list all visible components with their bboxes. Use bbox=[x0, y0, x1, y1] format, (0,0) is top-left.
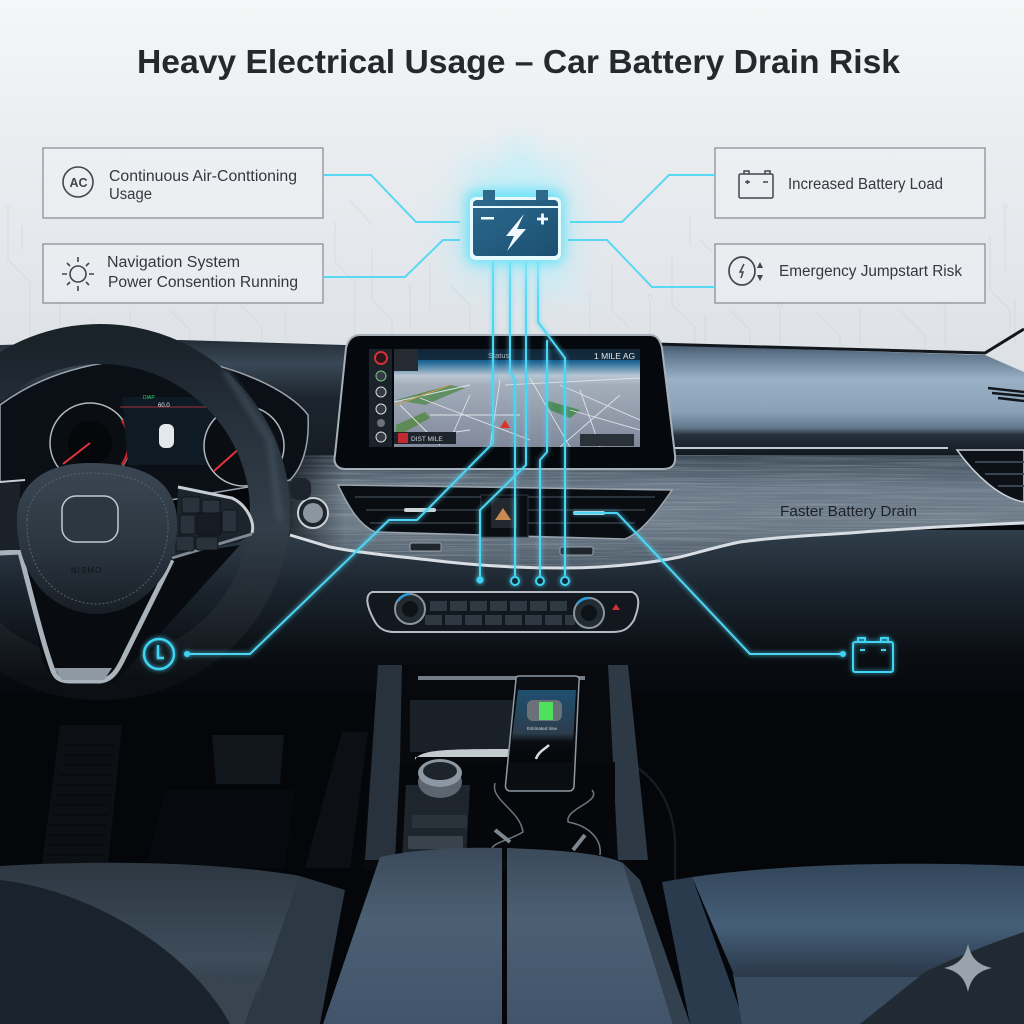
icon: battery outline bbox=[739, 171, 773, 198]
brake pedal bbox=[212, 735, 284, 784]
battery graphic bbox=[527, 700, 562, 721]
right air vent bbox=[957, 450, 1024, 502]
foot rest bbox=[42, 725, 122, 865]
icon: AC: AC bbox=[70, 176, 88, 190]
centre display: 60.0 bbox=[158, 403, 170, 409]
panel: centre console bbox=[362, 665, 648, 870]
watermark sparkle bbox=[944, 944, 992, 992]
circuit board pattern background bbox=[6, 200, 1015, 350]
panel: climate controls bbox=[367, 592, 638, 632]
dashboard corner vent bbox=[988, 388, 1024, 401]
phone charge symbol bbox=[536, 745, 549, 759]
driver seat foreground shadow bbox=[0, 880, 230, 1024]
battery charge level bbox=[539, 702, 553, 720]
wheel emblem bbox=[62, 496, 118, 542]
title: Heavy Electrical Usage – Car Battery Drain Risk bbox=[137, 44, 900, 81]
connector nodes bbox=[185, 577, 845, 656]
centre display bbox=[120, 395, 218, 465]
map bottom left widget bbox=[394, 432, 456, 444]
navigation map: 1 MILE AG bbox=[594, 351, 635, 361]
icon: clock bbox=[144, 639, 174, 669]
label: power consumption: Power Consention Running bbox=[108, 274, 298, 291]
label: navigation system: Navigation System bbox=[107, 254, 240, 271]
panel: navigation system bbox=[43, 244, 323, 303]
wheel rim joint highlight bbox=[225, 370, 280, 520]
sidebar icons bbox=[369, 349, 392, 447]
rotary controller bbox=[402, 759, 470, 860]
panel: instrument cluster bbox=[0, 358, 308, 500]
navigation map bbox=[394, 349, 640, 447]
cup holder bbox=[492, 783, 600, 855]
panel: navigation screen bbox=[334, 335, 675, 469]
panel: passenger seat bbox=[662, 864, 1024, 1024]
wheel buttons bbox=[176, 497, 237, 551]
phone with battery screen bbox=[505, 676, 579, 791]
phone status text: Estimated time bbox=[527, 726, 557, 731]
right gauge bbox=[204, 406, 284, 486]
label: battery load: Increased Battery Load bbox=[788, 176, 943, 193]
navigation map: Status bbox=[488, 351, 510, 360]
icon: jumpstart bbox=[729, 257, 763, 285]
right climate knob bbox=[574, 598, 604, 628]
panel: steering wheel hub: NISMO bbox=[71, 566, 102, 575]
floor mat bbox=[145, 790, 295, 868]
panel: driver seat bbox=[0, 863, 345, 1024]
silver dash trim bbox=[290, 523, 1024, 568]
panel: steering wheel hub bbox=[17, 463, 177, 614]
centre display: DIAP bbox=[143, 395, 155, 401]
car icon bbox=[159, 424, 174, 448]
connector lines: side panels to battery bbox=[324, 175, 715, 287]
panel: central air vents bbox=[338, 485, 672, 539]
a-pillar bbox=[655, 329, 1024, 353]
small dash emblems bbox=[410, 543, 593, 555]
panel: continuous air conditioning bbox=[43, 148, 323, 218]
engine start button bbox=[298, 498, 328, 528]
steering wheel rim bbox=[0, 344, 270, 680]
label: faster battery drain: Faster Battery Drain bbox=[780, 503, 917, 520]
navigation map: DIST MILE bbox=[411, 436, 443, 443]
panel: emergency jumpstart risk bbox=[715, 244, 985, 303]
hazard button bbox=[481, 495, 528, 537]
panel: armrest bbox=[323, 848, 690, 1024]
left climate knob bbox=[395, 594, 425, 624]
dash trim strip bbox=[675, 447, 948, 449]
accelerator pedal bbox=[305, 732, 368, 868]
panel: upper dashboard bbox=[340, 345, 1024, 460]
phone cable bbox=[590, 753, 675, 880]
foot well bbox=[0, 695, 1024, 1024]
stalk bbox=[290, 478, 311, 500]
icon: glowing battery bbox=[853, 638, 893, 672]
label: jumpstart risk: Emergency Jumpstart Risk bbox=[779, 263, 962, 280]
connector lines: car features to battery bbox=[187, 262, 843, 654]
map bottom right widget bbox=[580, 434, 634, 446]
panel: increased battery load bbox=[715, 148, 985, 218]
panel: steering wheel spokes bbox=[0, 480, 253, 682]
icon: AC bbox=[63, 167, 93, 197]
panel: lower dashboard bbox=[0, 530, 1024, 710]
icon: central battery bbox=[470, 190, 561, 260]
label: air conditioning: Continuous Air-Conttioning bbox=[109, 168, 297, 185]
climate warning light bbox=[612, 604, 620, 610]
label: usage: Usage bbox=[109, 186, 152, 203]
icon: sun bbox=[62, 257, 94, 291]
panel: left dashboard area bbox=[0, 340, 345, 470]
battery glow bbox=[415, 125, 615, 325]
map top bar bbox=[394, 349, 640, 360]
left gauge bbox=[50, 403, 130, 483]
panel: wood dash trim bbox=[285, 452, 1024, 572]
page background bbox=[0, 0, 1024, 375]
